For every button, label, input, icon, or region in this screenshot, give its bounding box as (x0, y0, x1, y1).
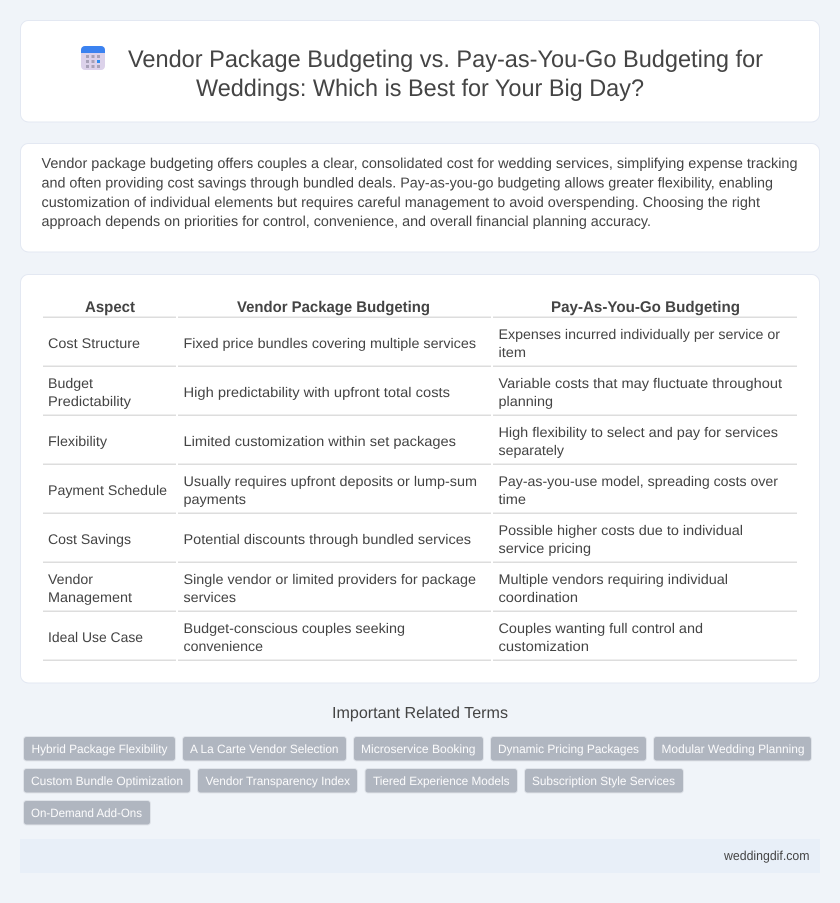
table header row: Aspect (85, 299, 135, 316)
row: budget predictability (48, 375, 782, 409)
row: vendor management: coordination (498, 589, 578, 605)
row: cost savings (48, 522, 743, 556)
row: budget predictability: Budget (48, 375, 93, 391)
row: payment schedule: payments (184, 491, 246, 507)
tag: Hybrid Package Flexibility (32, 742, 168, 756)
table header row (85, 299, 740, 316)
tag (524, 768, 684, 793)
row: cost structure (48, 326, 780, 360)
row: vendor management (48, 571, 728, 605)
panel: title header (20, 20, 820, 122)
panel: related term tags (24, 736, 812, 825)
row: vendor management: services (184, 589, 236, 605)
title (128, 46, 763, 102)
table header row: Vendor Package Budgeting (237, 299, 430, 316)
tag (365, 768, 518, 793)
title: Vendor Package Budgeting vs. Pay-as-You-Go Budgeting for (128, 46, 763, 73)
row: cost structure: Expenses incurred individually per service or (498, 326, 780, 342)
text block: description: customization of individual elements but requires careful management to avoid overspending. Choosing the right (42, 195, 760, 211)
row: payment schedule: Usually requires upfront deposits or lump-sum (184, 473, 477, 489)
row: cost structure: Cost Structure (48, 335, 140, 351)
row: cost savings: Potential discounts through bundled services (184, 531, 471, 547)
tag: Vendor Transparency Index (206, 774, 350, 788)
row: ideal use case (48, 620, 703, 654)
tag: Subscription Style Services (532, 774, 675, 788)
tag (182, 736, 346, 761)
row: budget predictability: High predictability with upfront total costs (184, 384, 450, 400)
row: ideal use case: Budget-conscious couples seeking (184, 620, 405, 636)
tag (24, 736, 176, 761)
footer (20, 839, 820, 873)
row: vendor management: Management (48, 589, 132, 605)
title: Weddings: Which is Best for Your Big Day? (196, 75, 644, 102)
tag: Custom Bundle Optimization (31, 774, 183, 788)
row: payment schedule: Pay-as-you-use model, spreading costs over (498, 473, 778, 489)
row: payment schedule (48, 473, 778, 507)
row: flexibility: separately (498, 442, 564, 458)
tag: Microservice Booking (361, 742, 476, 756)
row: cost savings: Possible higher costs due to individual (498, 522, 743, 538)
footer: weddingdif.com (723, 848, 810, 863)
row: budget predictability: planning (498, 393, 553, 409)
row: vendor management: Vendor (48, 571, 93, 587)
tag (354, 736, 484, 761)
row: flexibility: Flexibility (48, 433, 107, 449)
text block: description: and often providing cost savings through bundled deals. Pay-as-you-go budgeting allows greater flexibility, enabling (42, 176, 773, 192)
row: ideal use case: customization (498, 638, 589, 654)
tag: Dynamic Pricing Packages (498, 742, 639, 756)
row: cost savings: service pricing (498, 540, 591, 556)
tag (24, 800, 150, 825)
row: vendor management: Multiple vendors requiring individual (498, 571, 728, 587)
panel: description (20, 144, 820, 252)
row: ideal use case: Couples wanting full control and (498, 620, 703, 636)
tag (198, 768, 358, 793)
text block: description: approach depends on priorities for control, convenience, and overall financial planning accuracy. (42, 214, 651, 230)
row: payment schedule: Payment Schedule (48, 482, 167, 498)
row: payment schedule: time (498, 491, 526, 507)
tag: Modular Wedding Planning (662, 742, 804, 756)
row: cost savings: Cost Savings (48, 531, 131, 547)
row: ideal use case: Ideal Use Case (48, 629, 143, 645)
row: flexibility: High flexibility to select and pay for services (498, 424, 778, 440)
row: budget predictability: Predictability (48, 393, 131, 409)
row: flexibility: Limited customization within set packages (184, 433, 456, 449)
tag (654, 736, 812, 761)
row: cost structure: item (498, 344, 526, 360)
tag: A La Carte Vendor Selection (190, 742, 338, 756)
row: vendor management: Single vendor or limited providers for package (184, 571, 476, 587)
table header row: Pay-As-You-Go Budgeting (551, 299, 740, 316)
row: budget predictability: Variable costs that may fluctuate throughout (498, 375, 782, 391)
tag (490, 736, 646, 761)
row: cost structure: Fixed price bundles covering multiple services (184, 335, 476, 351)
text block: description: Vendor package budgeting offers couples a clear, consolidated cost for wedding services, simplifying expense tracking (42, 156, 798, 172)
row: ideal use case: convenience (184, 638, 263, 654)
tag: On-Demand Add-Ons (31, 806, 142, 820)
icon: calendar (81, 46, 105, 70)
tag: Tiered Experience Models (373, 774, 510, 788)
row: flexibility (48, 424, 778, 458)
text block: description (42, 156, 798, 230)
heading: important related terms: Important Related Terms (332, 705, 508, 722)
tag (24, 768, 190, 793)
panel: comparison table (20, 274, 820, 683)
